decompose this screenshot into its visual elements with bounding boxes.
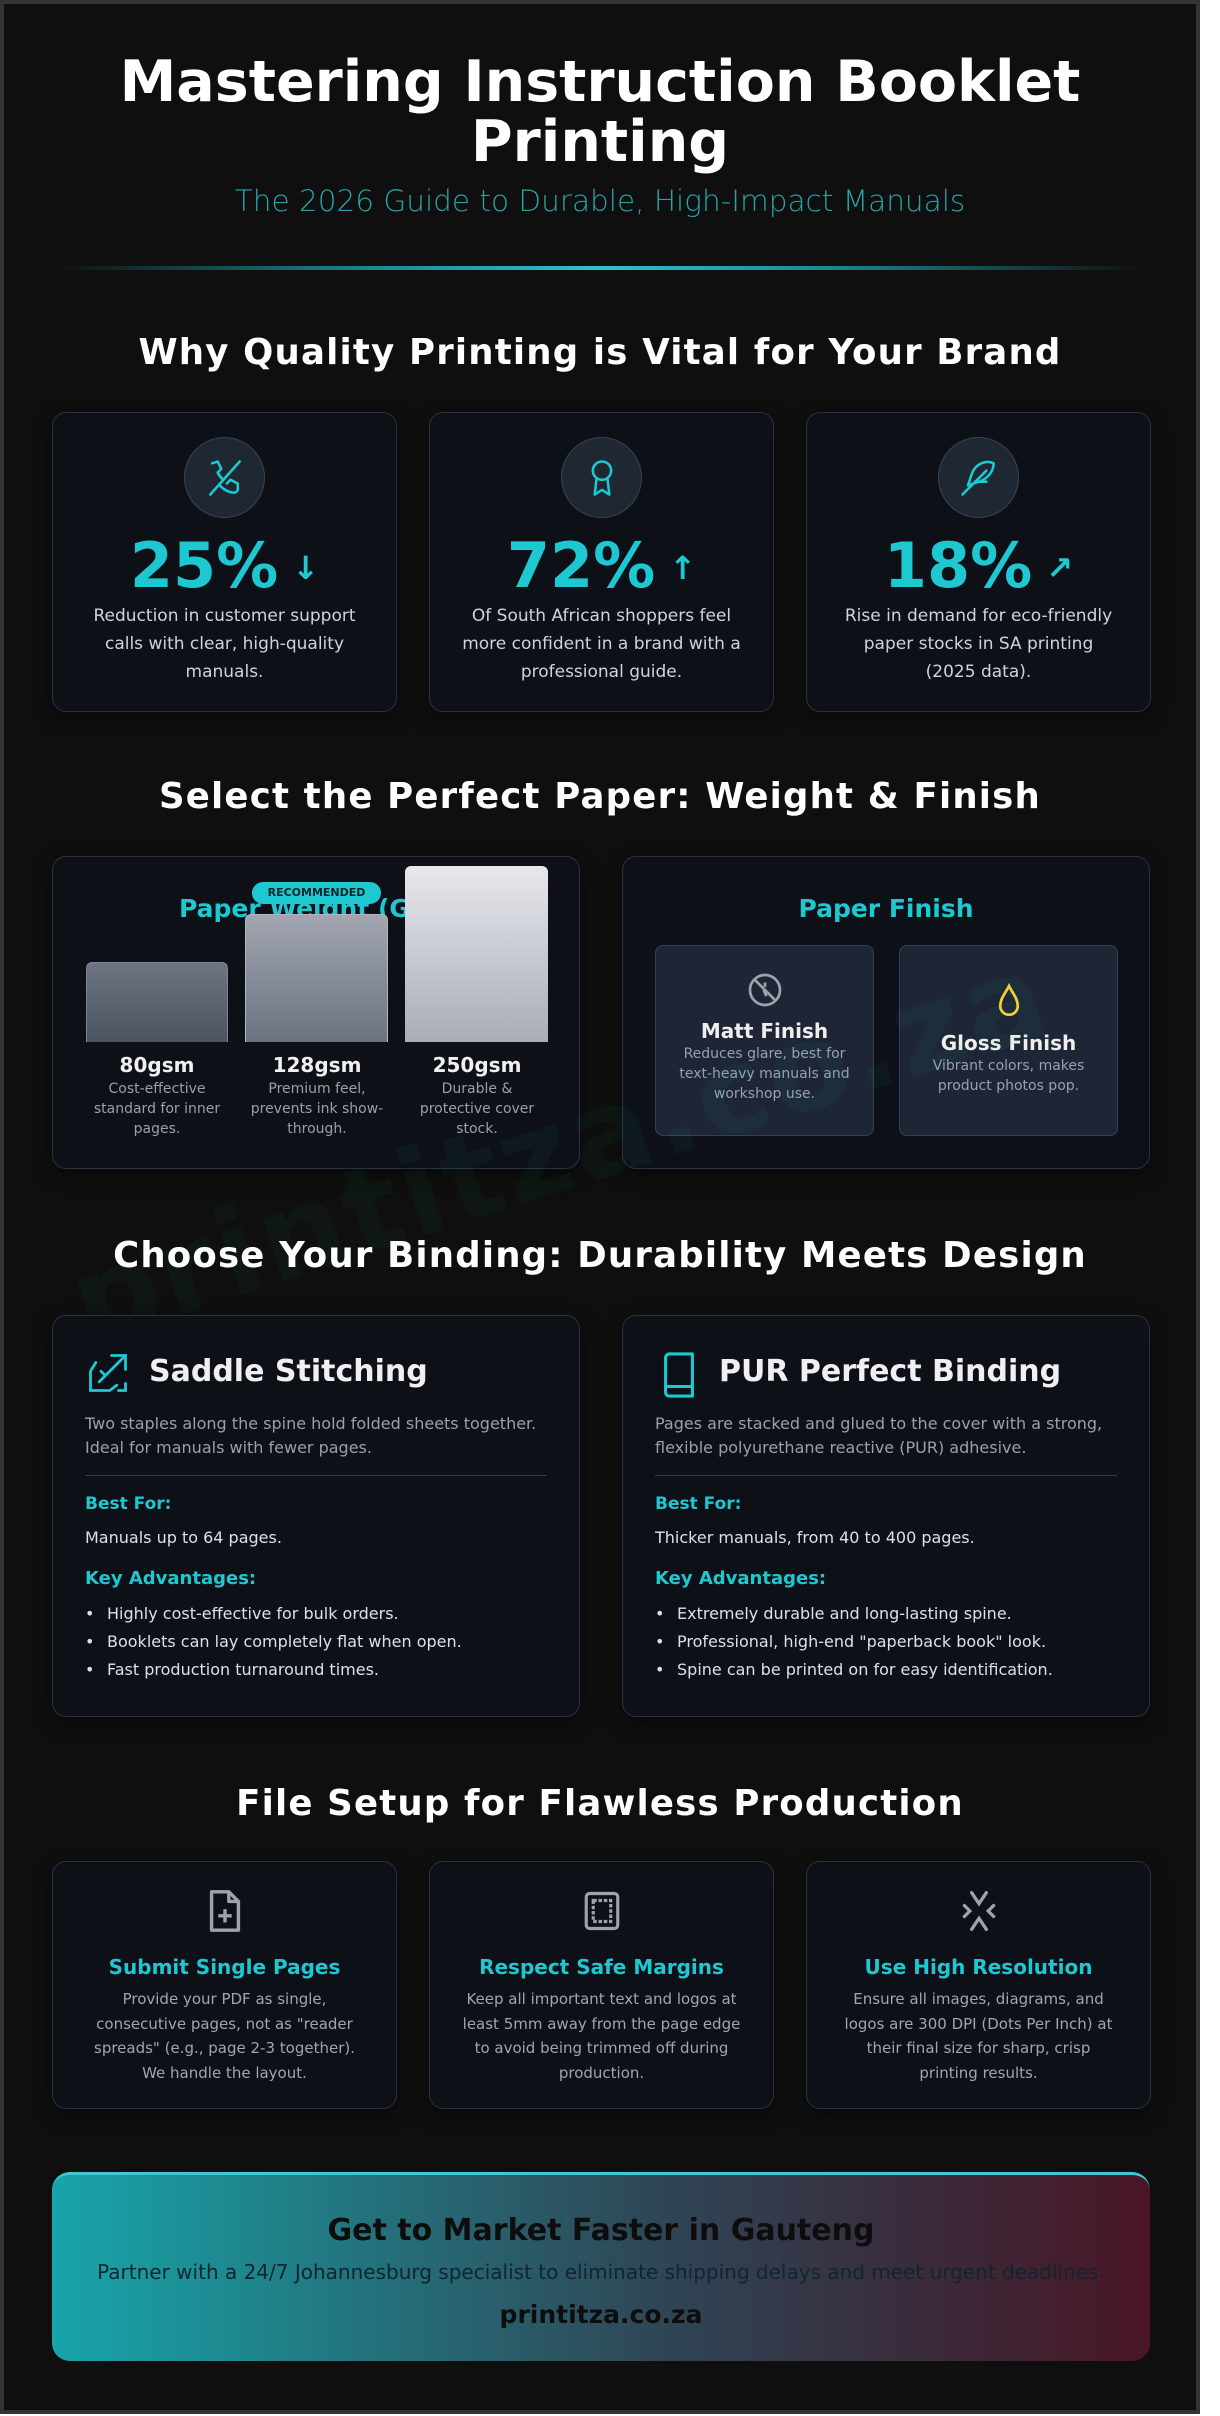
subtitle: The 2026 Guide to Durable, High-Impact Manuals	[235, 184, 965, 218]
stat card 3	[806, 412, 1151, 712]
card: PUR binding: Spine can be printed on for easy identification.	[677, 1660, 1053, 1679]
card: PUR binding: Pages are stacked and glued to the cover with a strong, flexible polyurethane reactive (PUR) adhesive.	[655, 1414, 1102, 1457]
panel title: Paper Finish	[798, 894, 974, 923]
card: PUR binding: Professional, high-end "paperback book" look.	[677, 1632, 1046, 1651]
heading: paper: Select the Perfect Paper: Weight & Finish	[159, 776, 1041, 817]
icon: no-glare	[748, 974, 782, 1006]
heading: file setup: File Setup for Flawless Production	[236, 1783, 964, 1824]
card: saddle stitching: Saddle Stitching	[149, 1354, 428, 1389]
gloss finish	[899, 945, 1118, 1136]
CTA title: Get to Market Faster in Gauteng	[328, 2213, 874, 2248]
icon: feather	[938, 437, 1019, 518]
stat 72%: 72% ↑	[507, 529, 696, 602]
watermark: printitza.co.za	[54, 926, 1066, 1373]
label 128gsm	[251, 1053, 383, 1137]
stat text: Reduction in customer support calls with clear, high-quality manuals.	[93, 606, 356, 682]
label 250gsm	[420, 1053, 534, 1137]
label 250gsm: Durable & protective cover stock.	[420, 1081, 534, 1137]
card: saddle stitching: Key Advantages:	[85, 1568, 256, 1589]
icon: drop	[998, 983, 1020, 1016]
card: high resolution: Ensure all images, diagrams, and logos are 300 DPI (Dots Per Inch) at their final size for sharp, crisp printing results.	[845, 1990, 1112, 2082]
label 80gsm	[94, 1053, 220, 1137]
card: high resolution	[806, 1861, 1151, 2109]
title: Printing	[471, 109, 729, 175]
card: saddle stitching: Fast production turnaround times.	[107, 1660, 379, 1679]
heading: binding: Choose Your Binding: Durability Meets Design	[113, 1235, 1087, 1276]
CTA subtext: Partner with a 24/7 Johannesburg specialist to eliminate shipping delays and meet urgent deadlines.	[97, 2260, 1105, 2284]
CTA url: printitza.co.za	[500, 2300, 702, 2329]
matt finish	[655, 945, 874, 1136]
card: safe margins: Respect Safe Margins	[479, 1955, 724, 1979]
matt finish: Reduces glare, best for text-heavy manuals and workshop use.	[679, 1046, 850, 1102]
card: single pages: Provide your PDF as single, consecutive pages, not as "reader spreads" (e.g., page 2-3 together). We handle the layout.	[94, 1990, 355, 2082]
card: high resolution: Use High Resolution	[865, 1955, 1092, 1979]
CTA banner	[52, 2172, 1150, 2361]
card: saddle stitching: Two staples along the spine hold folded sheets together. Ideal for manuals with fewer pages.	[85, 1414, 536, 1457]
gloss finish: Gloss Finish	[941, 1031, 1076, 1055]
panel title: Paper Weight (GSM)	[179, 894, 464, 923]
badge recommended	[252, 882, 381, 904]
card: saddle stitching	[52, 1315, 580, 1717]
card: safe margins	[429, 1861, 774, 2109]
label 250gsm: 250gsm	[433, 1053, 521, 1077]
bar 128gsm	[245, 914, 388, 1042]
card: PUR binding: Extremely durable and long-lasting spine.	[677, 1604, 1012, 1623]
heading: why quality: Why Quality Printing is Vital for Your Brand	[138, 332, 1062, 373]
stat text: Rise in demand for eco-friendly paper stocks in SA printing (2025 data).	[845, 606, 1112, 682]
card: PUR binding	[622, 1315, 1150, 1717]
label 128gsm: Premium feel, prevents ink show-through.	[251, 1081, 383, 1137]
icon: award	[561, 437, 642, 518]
card: single pages: Submit Single Pages	[109, 1955, 340, 1979]
badge recommended: RECOMMENDED	[268, 886, 365, 899]
card: saddle stitching: Manuals up to 64 pages.	[85, 1528, 282, 1547]
icon: phone off	[184, 437, 265, 518]
card: single pages	[52, 1861, 397, 2109]
card: PUR binding: PUR Perfect Binding	[719, 1354, 1061, 1389]
stat card 2	[429, 412, 774, 712]
card: saddle stitching: Highly cost-effective for bulk orders.	[107, 1604, 399, 1623]
card: saddle stitching: Booklets can lay completely flat when open.	[107, 1632, 462, 1651]
matt finish: Matt Finish	[701, 1019, 828, 1043]
bar 250gsm	[405, 866, 548, 1042]
label 80gsm: Cost-effective standard for inner pages.	[94, 1081, 220, 1137]
card: PUR binding: Thicker manuals, from 40 to 400 pages.	[655, 1528, 975, 1547]
panel: paper weight	[52, 856, 580, 1169]
icon: file plus	[210, 1890, 240, 1932]
title	[120, 49, 1080, 175]
gloss finish: Vibrant colors, makes product photos pop.	[933, 1058, 1084, 1094]
icon: margins	[584, 1892, 620, 1930]
divider glow line	[55, 266, 1145, 270]
icon: compress	[962, 1890, 996, 1932]
label 80gsm: 80gsm	[120, 1053, 194, 1077]
stat text: Of South African shoppers feel more confident in a brand with a professional guide.	[462, 606, 741, 682]
card: safe margins: Keep all important text and logos at least 5mm away from the page edge to avoid being trimmed off during production.	[463, 1990, 740, 2082]
stat 18%: 18% ↗	[884, 529, 1073, 602]
card: PUR binding: Key Advantages:	[655, 1568, 826, 1589]
card: saddle stitching: Best For:	[85, 1494, 171, 1514]
icon: stitch	[89, 1354, 127, 1392]
icon: book	[664, 1352, 694, 1398]
stat 25%: 25% ↓	[130, 529, 319, 602]
stat card 1	[52, 412, 397, 712]
card: PUR binding: Best For:	[655, 1494, 741, 1514]
label 128gsm: 128gsm	[273, 1053, 361, 1077]
panel: paper finish	[622, 856, 1150, 1169]
bar 80gsm	[86, 962, 228, 1042]
title: Mastering Instruction Booklet	[120, 49, 1080, 115]
